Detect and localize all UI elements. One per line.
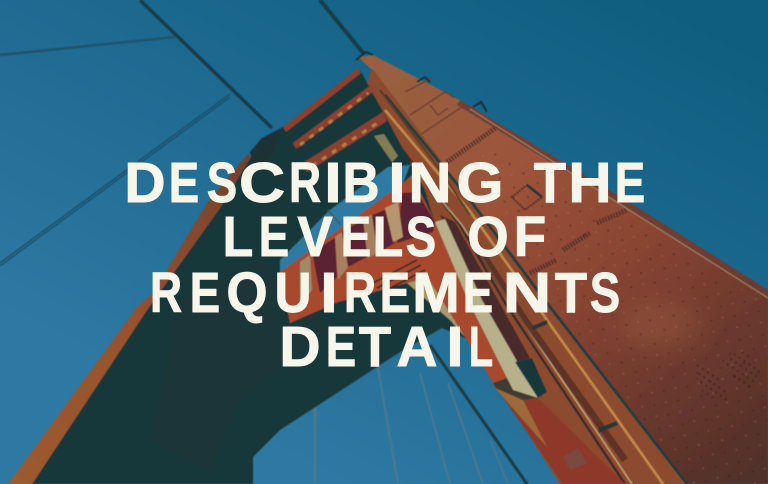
dark maroon panel <box>440 215 530 362</box>
title line 4: D <box>279 315 321 379</box>
title line 2: O <box>467 205 509 269</box>
strip cross braces <box>532 320 618 433</box>
title line 2: F <box>514 205 546 269</box>
suspension cables <box>0 0 527 484</box>
tan wedge above window <box>407 278 465 337</box>
short cable in gap <box>328 210 341 225</box>
arch shading <box>150 260 330 470</box>
title line 4: E <box>326 315 356 379</box>
title line 1: S <box>207 151 237 215</box>
lower red band <box>493 383 625 484</box>
title line 1: T <box>534 151 566 215</box>
lower tan gusset <box>495 388 547 447</box>
tower cap brackets <box>356 52 487 112</box>
shadow wedge under stripe <box>493 378 538 400</box>
title line 1: N <box>408 151 452 215</box>
title line 2: L <box>373 205 403 269</box>
title line 3: I <box>320 261 338 325</box>
title line 1: E <box>615 151 645 215</box>
title line 4: T <box>359 315 391 379</box>
orange arch edge <box>8 155 252 484</box>
title line 3: U <box>274 261 312 325</box>
title line 3: Q <box>226 261 268 325</box>
plate grate bands <box>447 127 627 273</box>
underside of arch <box>32 70 470 484</box>
title line 2: V <box>297 205 333 269</box>
sky gap in arch <box>280 165 410 272</box>
tower outer rim <box>457 100 768 298</box>
title line 1: R <box>289 151 321 215</box>
title line 3: R <box>150 261 182 325</box>
title line 3 <box>150 261 620 325</box>
tan beam stripes <box>300 202 403 305</box>
title line 1 <box>124 151 645 215</box>
title line 1: G <box>456 151 504 215</box>
title line 1: I <box>388 151 406 215</box>
title line 3: E <box>190 261 220 325</box>
title line 3: T <box>555 261 587 325</box>
title line 2: S <box>406 205 436 269</box>
truss cream gusset <box>374 134 398 162</box>
title line 3: R <box>344 261 376 325</box>
arch shoulder block <box>250 127 283 166</box>
title line 2: L <box>223 205 253 269</box>
title line 1: E <box>169 151 199 215</box>
strip dark outline <box>385 95 687 484</box>
plate square hatch <box>512 185 542 210</box>
dense rivet cluster <box>695 348 760 402</box>
title line 1: C <box>239 151 285 215</box>
title line 1: B <box>342 151 380 215</box>
title line 3: E <box>380 261 410 325</box>
title line 3: N <box>503 261 551 325</box>
title line 1: I <box>324 151 342 215</box>
plate rivets <box>470 140 768 484</box>
title line 2: E <box>341 205 371 269</box>
dark grate lines on beam <box>373 260 425 293</box>
upper tower grid marks <box>405 78 478 135</box>
red diagonal beam <box>280 175 513 390</box>
tower plate face <box>358 55 768 484</box>
title line 2 <box>223 205 546 269</box>
title line 2: E <box>259 205 289 269</box>
title line 4 <box>279 315 493 379</box>
side strip band <box>365 68 687 484</box>
plate light patch <box>620 303 700 347</box>
title line 1: D <box>124 151 166 215</box>
title line 1: H <box>568 151 612 215</box>
lower band grate <box>563 448 587 470</box>
strip inner lines <box>378 90 663 484</box>
title line 4: A <box>396 315 438 379</box>
title line 3: E <box>463 261 493 325</box>
title line 4: L <box>469 315 493 379</box>
title line 3: S <box>590 261 620 325</box>
title line 3: M <box>412 261 460 325</box>
maroon beam panels <box>312 192 435 293</box>
title line 4: I <box>446 315 464 379</box>
upper truss bars <box>283 68 387 172</box>
cream stripe <box>435 219 538 398</box>
dark block by the stripe <box>515 358 547 398</box>
truss bar highlights <box>300 93 382 166</box>
